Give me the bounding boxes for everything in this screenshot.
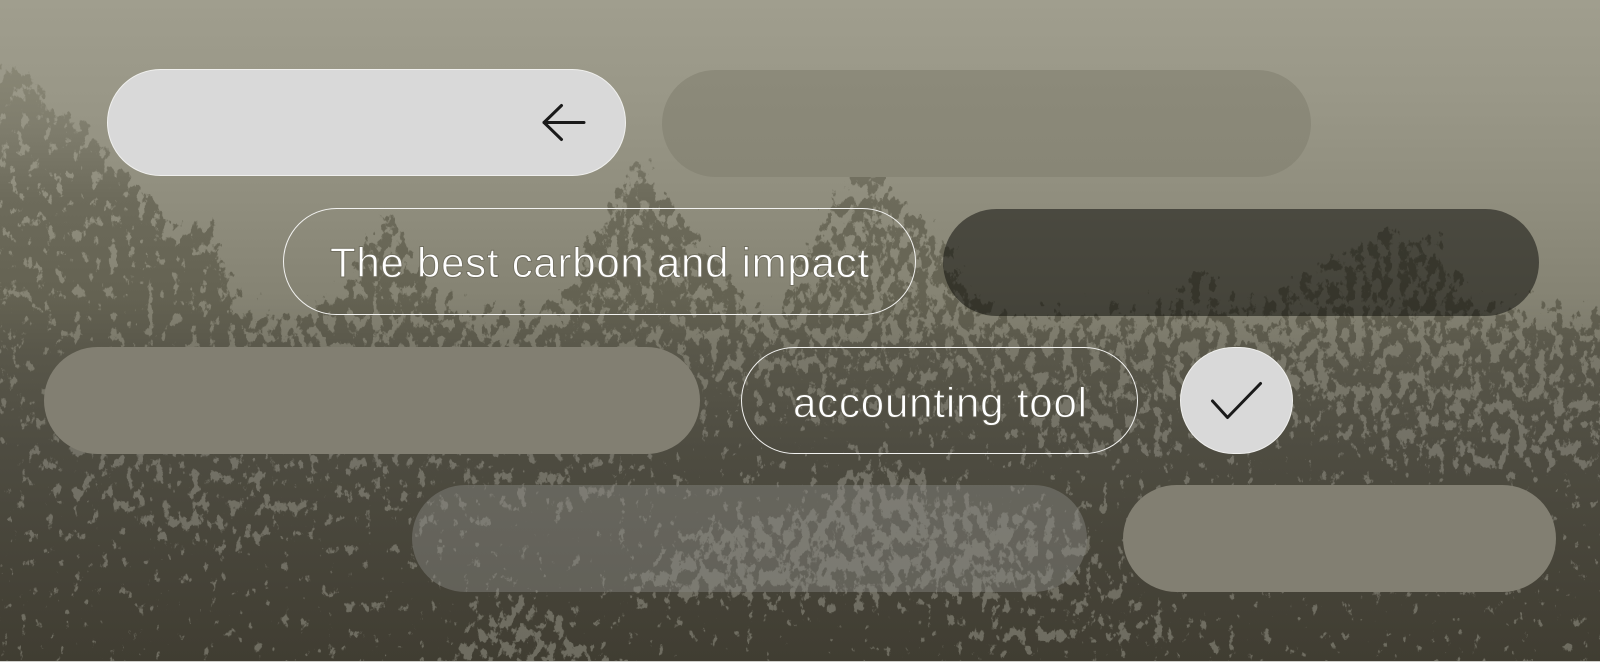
- pill: taupe blank left: [44, 347, 700, 454]
- pill: dark blank: [943, 209, 1539, 316]
- pill: outlined headline line one: The best carbon and impact: [330, 239, 869, 286]
- pill: outlined headline line one: [284, 208, 916, 314]
- pill: muted blank top right: [662, 70, 1311, 177]
- check button: [1180, 348, 1292, 454]
- pill: outlined headline line two: [742, 348, 1138, 454]
- pill: outlined headline line two: accounting tool: [793, 379, 1087, 426]
- icon: check mark: [1212, 384, 1260, 418]
- pill: taupe blank right: [1123, 485, 1556, 592]
- pill: light with arrow: [108, 70, 626, 176]
- icon: left arrow: [544, 106, 584, 140]
- pill: translucent blank: [412, 485, 1087, 592]
